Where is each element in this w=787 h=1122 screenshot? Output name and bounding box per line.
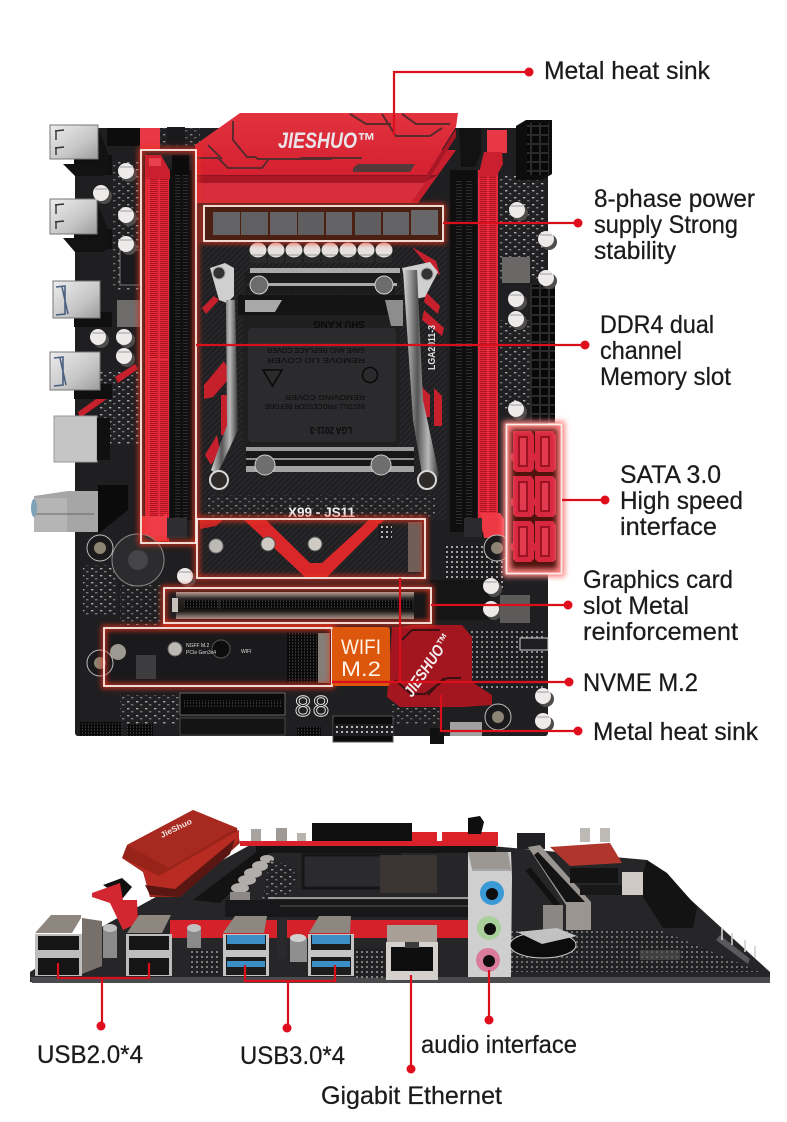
- socket cover markings: LGA 2011-3: [310, 424, 352, 435]
- motherboard top view photo: [31, 113, 561, 744]
- M.2 WiFi area: [104, 629, 332, 686]
- USB 3.0 ports: [223, 916, 354, 976]
- board silk text: [288, 325, 438, 520]
- callout: graphics card slot: Graphics card: [583, 566, 733, 594]
- callout: SATA 3.0: SATA 3.0: [620, 461, 721, 489]
- callout: 8-phase power: supply Strong: [594, 211, 738, 239]
- 7-segment debug display: 88: [294, 691, 330, 726]
- socket cover markings: [263, 318, 378, 435]
- callout: metal heat sink lower: Metal heat sink: [593, 718, 758, 746]
- callout: SATA 3.0: interface: [620, 513, 717, 541]
- callout: DDR4 memory: Memory slot: [600, 363, 731, 391]
- callout: DDR4 memory: DDR4 dual: [600, 311, 714, 339]
- logo: JieShuo on lower heat sink: JIESHUO™: [401, 631, 456, 700]
- LAN port: [386, 925, 438, 980]
- WIFI M.2 badge: WIFI: [341, 636, 381, 659]
- callout: DDR4 memory: [196, 311, 731, 391]
- power connectors: [516, 120, 555, 423]
- highlight boxes: [104, 150, 562, 686]
- right rear parts: [510, 828, 755, 964]
- rear parts: [170, 816, 545, 938]
- callout: USB2.0*4: [37, 963, 149, 1069]
- callout: metal heat sink top: Metal heat sink: [544, 57, 710, 85]
- red PCB stripes: [78, 247, 444, 465]
- SATA connectors: [507, 425, 561, 573]
- right DIMM slots: [450, 128, 507, 538]
- callout: metal heat sink top: [394, 57, 710, 135]
- callout: USB2.0*4: USB2.0*4: [37, 1041, 143, 1069]
- callout: NVME M.2: [332, 578, 698, 697]
- callout: Gigabit Ethernet: Gigabit Ethernet: [321, 1082, 502, 1110]
- VRM heat spreader blocks: [205, 207, 442, 240]
- callout: DDR4 memory: channel: [600, 337, 682, 365]
- callout: Gigabit Ethernet: [321, 975, 502, 1110]
- top heat sink: [195, 113, 458, 203]
- socket cover markings: INSTALL PROCESSOR BEFORE: [265, 402, 365, 409]
- USB 2.0 ports: [35, 915, 172, 976]
- capacitors and inductors: [90, 163, 557, 732]
- logo: JieShuo on top heat sink: JIESHUO™: [278, 128, 375, 153]
- bottom heat sink: [387, 625, 492, 707]
- M.2 WiFi area: WIFI: [241, 649, 252, 655]
- callout: audio interface: [421, 970, 577, 1059]
- red heat sink in perspective: [122, 810, 240, 897]
- callout: graphics card slot: slot Metal: [583, 592, 689, 620]
- callout: 8-phase power: 8-phase power: [594, 185, 755, 213]
- callout: metal heat sink lower: [441, 695, 758, 746]
- motherboard rear IO side photo: [30, 810, 770, 983]
- socket cover markings: REMOVE LID COVER: [267, 356, 365, 363]
- callout: graphics card slot: reinforcement: [583, 618, 738, 646]
- red memory clip: [92, 878, 138, 930]
- callout: NVME M.2: NVME M.2: [583, 669, 698, 697]
- socket cover markings: REMOVING COVER: [285, 393, 365, 400]
- M.2 WiFi area: NGFF M.2: [186, 643, 210, 649]
- callout: USB3.0*4: [240, 965, 345, 1070]
- WIFI M.2 badge: [332, 627, 390, 686]
- callout: USB3.0*4: USB3.0*4: [240, 1042, 345, 1070]
- socket cover markings: SHU KANG: [313, 318, 365, 329]
- CPU socket: [210, 262, 439, 489]
- silver USB and LAN and audio ports on left: [31, 125, 128, 534]
- PCB in perspective: [30, 845, 770, 982]
- logo: side view heat sink: JieShuo: [159, 817, 194, 840]
- M.2 WiFi area: PCIe Gen3x4: [186, 650, 216, 656]
- socket cover markings: SAVE AND REPLACE COVER: [267, 346, 365, 353]
- callout: SATA 3.0: High speed: [620, 487, 743, 515]
- lower board parts: [80, 534, 548, 744]
- callout: SATA 3.0: [562, 461, 743, 541]
- PCIe x16 slot: [172, 592, 429, 619]
- callout: graphics card slot: [431, 566, 738, 646]
- WIFI M.2 badge: M.2: [341, 658, 381, 681]
- callout: 8-phase power: [443, 185, 755, 265]
- capacitors in side view: [103, 919, 385, 978]
- callout: 8-phase power: stability: [594, 237, 676, 265]
- audio jacks plate: [468, 852, 512, 977]
- board: PCB: [75, 128, 548, 736]
- board silk text: LGA2011-3: [427, 325, 438, 370]
- callout: audio interface: audio interface: [421, 1031, 577, 1059]
- left DIMM slots: [140, 127, 192, 542]
- board silk text: X99 - JS11: [288, 504, 355, 520]
- red V on M.2 area: [196, 519, 425, 578]
